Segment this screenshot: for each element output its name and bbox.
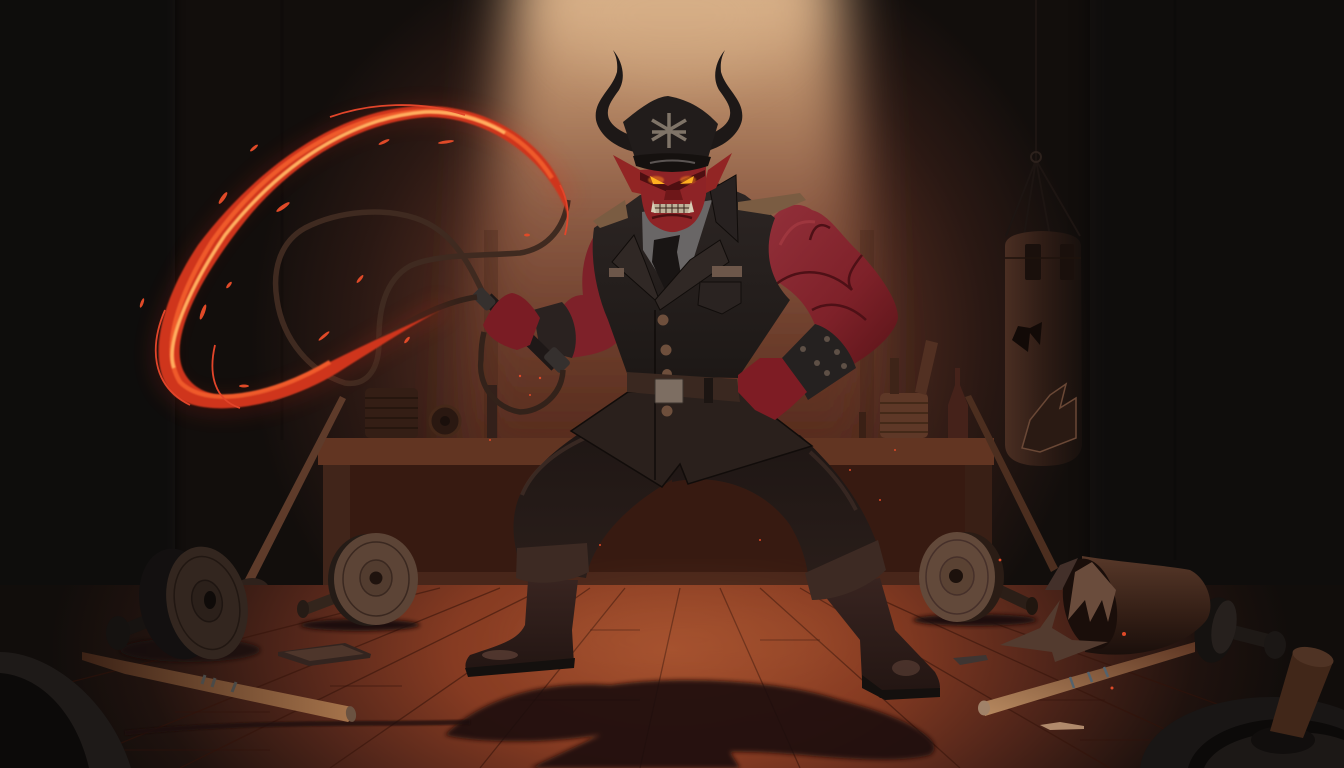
punching bag	[1005, 0, 1082, 466]
right bracer	[782, 324, 856, 400]
fallen stick right	[978, 642, 1195, 716]
demon figure	[465, 50, 940, 700]
post	[1251, 643, 1336, 754]
right arm	[762, 205, 898, 365]
right fist	[738, 358, 807, 420]
right boot	[805, 540, 940, 700]
embers	[139, 138, 1126, 689]
whip loop in front	[270, 297, 563, 412]
dumbbell right	[1190, 594, 1286, 666]
leaning stick right	[965, 395, 1058, 572]
handle	[297, 598, 335, 618]
flaming whip trail	[156, 105, 568, 408]
torn punching bag on floor	[953, 554, 1210, 662]
left horn	[596, 50, 644, 153]
handle	[998, 590, 1038, 615]
flame ribbon	[159, 106, 568, 408]
legs	[513, 420, 884, 590]
book on floor	[278, 643, 371, 666]
left boot	[465, 543, 589, 677]
character floor shadow	[125, 680, 934, 768]
wood chip	[1040, 722, 1084, 730]
rope behind the figure	[276, 200, 568, 383]
bag tears	[1012, 322, 1042, 352]
left weight plate with dumbbell	[106, 539, 260, 667]
flame wisps	[156, 105, 568, 408]
flame mid	[172, 111, 552, 397]
plate stack left	[365, 388, 418, 438]
pocket	[698, 282, 741, 314]
bench underside	[323, 465, 992, 585]
bench props	[487, 340, 968, 438]
vest	[593, 175, 806, 480]
left bracer	[533, 302, 576, 358]
shirt and collar	[642, 200, 712, 290]
ring weight	[430, 406, 460, 436]
chain	[1006, 0, 1080, 236]
scrap on floor	[953, 655, 988, 665]
left fist	[483, 293, 540, 350]
coat skirt	[571, 392, 812, 487]
outer glow	[161, 113, 567, 406]
cap badge	[652, 113, 686, 148]
weight plate right	[913, 532, 1038, 626]
handle	[106, 616, 145, 650]
left arm	[555, 236, 622, 358]
epaulettes	[593, 193, 806, 228]
ears	[613, 153, 732, 195]
buttons	[658, 314, 672, 416]
second weight plate	[297, 533, 420, 631]
belt	[627, 372, 740, 403]
bag body	[1005, 231, 1082, 466]
leaning stick left	[235, 396, 346, 600]
flame core	[172, 112, 505, 368]
bench top	[318, 438, 994, 465]
wooden floor	[0, 585, 1344, 768]
right horn	[694, 50, 742, 153]
medal bar	[609, 266, 742, 277]
workbench with equipment	[318, 340, 994, 587]
lapels	[612, 175, 738, 310]
face	[640, 165, 706, 232]
plate stack right	[880, 358, 928, 438]
fallen stick left	[82, 652, 357, 723]
whip handle	[471, 286, 571, 374]
large plate bottom left	[0, 652, 131, 768]
large plate bottom right	[1140, 643, 1344, 768]
cap	[623, 96, 718, 172]
